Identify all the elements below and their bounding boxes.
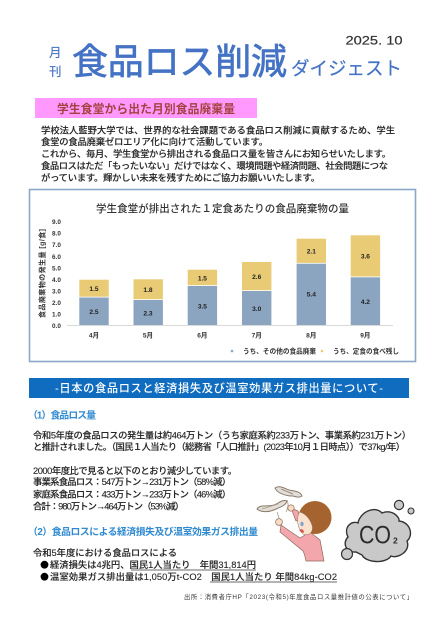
bar: April [79,280,109,325]
legend [231,346,399,356]
face [298,512,313,535]
section banner: -日本の食品ロスと経済損失及び温室効果ガス排出量について- [55,381,383,395]
y axis labels: 7.0 [52,242,61,249]
y axis labels [52,219,61,330]
y axis labels: 4.0 [52,277,61,284]
bar: September [351,235,380,325]
economic loss text: 令和5年度における食品ロスによる [33,547,177,558]
chart title: 学生食堂が排出された１定食あたりの食品廃棄物の量 [96,202,350,215]
reduction list [33,465,237,511]
intro text: 食品ロスはただ「もったいない」だけではなく、環境問題や経済問題、社会問題につな [41,160,388,171]
bar: May: 1.8 [143,287,153,294]
month labels: 7月 [252,332,262,340]
month labels: 6月 [197,332,208,340]
title: 刊 [49,65,62,79]
bar: August: 2.1 [307,248,316,256]
y axis labels: 3.0 [52,288,61,296]
y axis labels: 2.0 [52,300,61,307]
food loss paragraph [33,429,411,452]
illustration: CO2 cloud: CO [359,522,391,550]
bar: September: 3.6 [361,254,370,260]
reduction list: 事業系食品ロス：547万トン→231万トン（58%減） [33,476,231,487]
bar: April: 2.5 [89,309,99,316]
heading: monthly food waste [35,98,257,118]
illustration: CO2 cloud: 2 [393,536,398,546]
subheading: economic loss and emissions: （2）食品ロスによる経済損失及び温室効果ガス排出量 [28,525,258,538]
reduction list: 家庭系食品ロス：433万トン→233万トン（46%減） [33,488,231,499]
y axis title: 食品廃棄物の発生量 [g/食] [38,229,46,318]
source: 出所：消費者庁HP「2023(令和5)年度食品ロス量推計値の公表について」 [184,592,413,601]
subheading: food loss amount: （1）食品ロス量 [28,408,96,422]
intro text: これから、毎月、学生食堂から排出される食品ロス量を皆さんにお知らせいたします。 [41,148,391,159]
bar: July: 3.0 [252,306,262,313]
bar: May: 2.3 [143,310,153,318]
y axis labels: 8.0 [52,230,61,238]
title [49,41,402,82]
tear [300,522,304,526]
title: ダイジェスト [291,58,402,79]
month labels [89,332,371,340]
mouth [300,529,304,533]
title: 食品ロス削減 [72,41,287,82]
reduction list: 2000年度比で見ると以下のとおり減少しています。 [33,465,237,476]
y axis labels: 5.0 [52,266,61,272]
y axis labels: 6.0 [52,254,61,261]
month labels: 8月 [306,332,316,340]
reduction list: 合計：980万トン→464万トン（53%減） [33,500,184,511]
hair [298,501,332,534]
chart panel [30,190,416,362]
illustration: person catching food waste [257,487,332,561]
bar: August: 5.4 [307,292,316,298]
flying waste 1 [275,487,302,497]
economic loss text: 経済損失は4兆円、国民1人当たり 年間31,814円 [50,559,256,570]
y axis labels: 9.0 [52,219,61,226]
body [280,508,324,561]
flying waste 2 [257,500,288,518]
economic loss text [33,547,337,582]
food loss paragraph: と推計されました。（国民１人当たり（総務省「人口推計」(2023年10月１日時点））で37kg/年） [33,441,405,452]
legend: うち、定食の食べ残し [333,346,399,356]
section banner [29,378,409,398]
intro text: 学校法人藍野大学では、世界的な社会課題である食品ロス削減に貢献するため、学生 [41,124,395,135]
bar: June [188,270,217,325]
month labels: 5月 [143,332,153,340]
legend: うち、その他の食品廃棄 [243,346,316,356]
bar: September: 4.2 [361,299,370,306]
month labels: 9月 [360,332,371,340]
date: 2025. 10 [346,34,403,48]
intro text [41,124,395,183]
hands [276,505,294,525]
y axis labels: 1.0 [52,312,61,318]
axis baseline [67,325,393,326]
intro text: 食堂の食品廃棄ゼロエリア化に向けて活動しています。 [41,136,268,147]
bar: July: 2.6 [252,274,262,281]
heading: monthly food waste: 学生食堂から出た月別食品廃棄量 [57,102,235,116]
food loss paragraph: 令和5年度の食品ロスの発生量は約464万トン（うち家庭系約233万トン、事業系約231万トン） [33,429,411,440]
illustration: CO2 cloud [342,500,414,562]
bar: June: 1.5 [198,276,207,282]
bar: June: 3.5 [198,304,207,310]
economic loss text: 温室効果ガス排出量は1,050万t-CO2 国民1人当たり 年間84kg-CO2 [50,571,337,582]
title: 月 [49,46,62,60]
y axis labels: 0.0 [52,323,61,330]
intro text: がっています。輝かしい未来を残すためにご協力お願いいたします。 [41,172,320,183]
bar: July [242,262,271,325]
bar: May [134,279,163,325]
bar: April: 1.5 [89,286,99,293]
month labels: 4月 [89,332,99,340]
bar: August [297,239,326,325]
